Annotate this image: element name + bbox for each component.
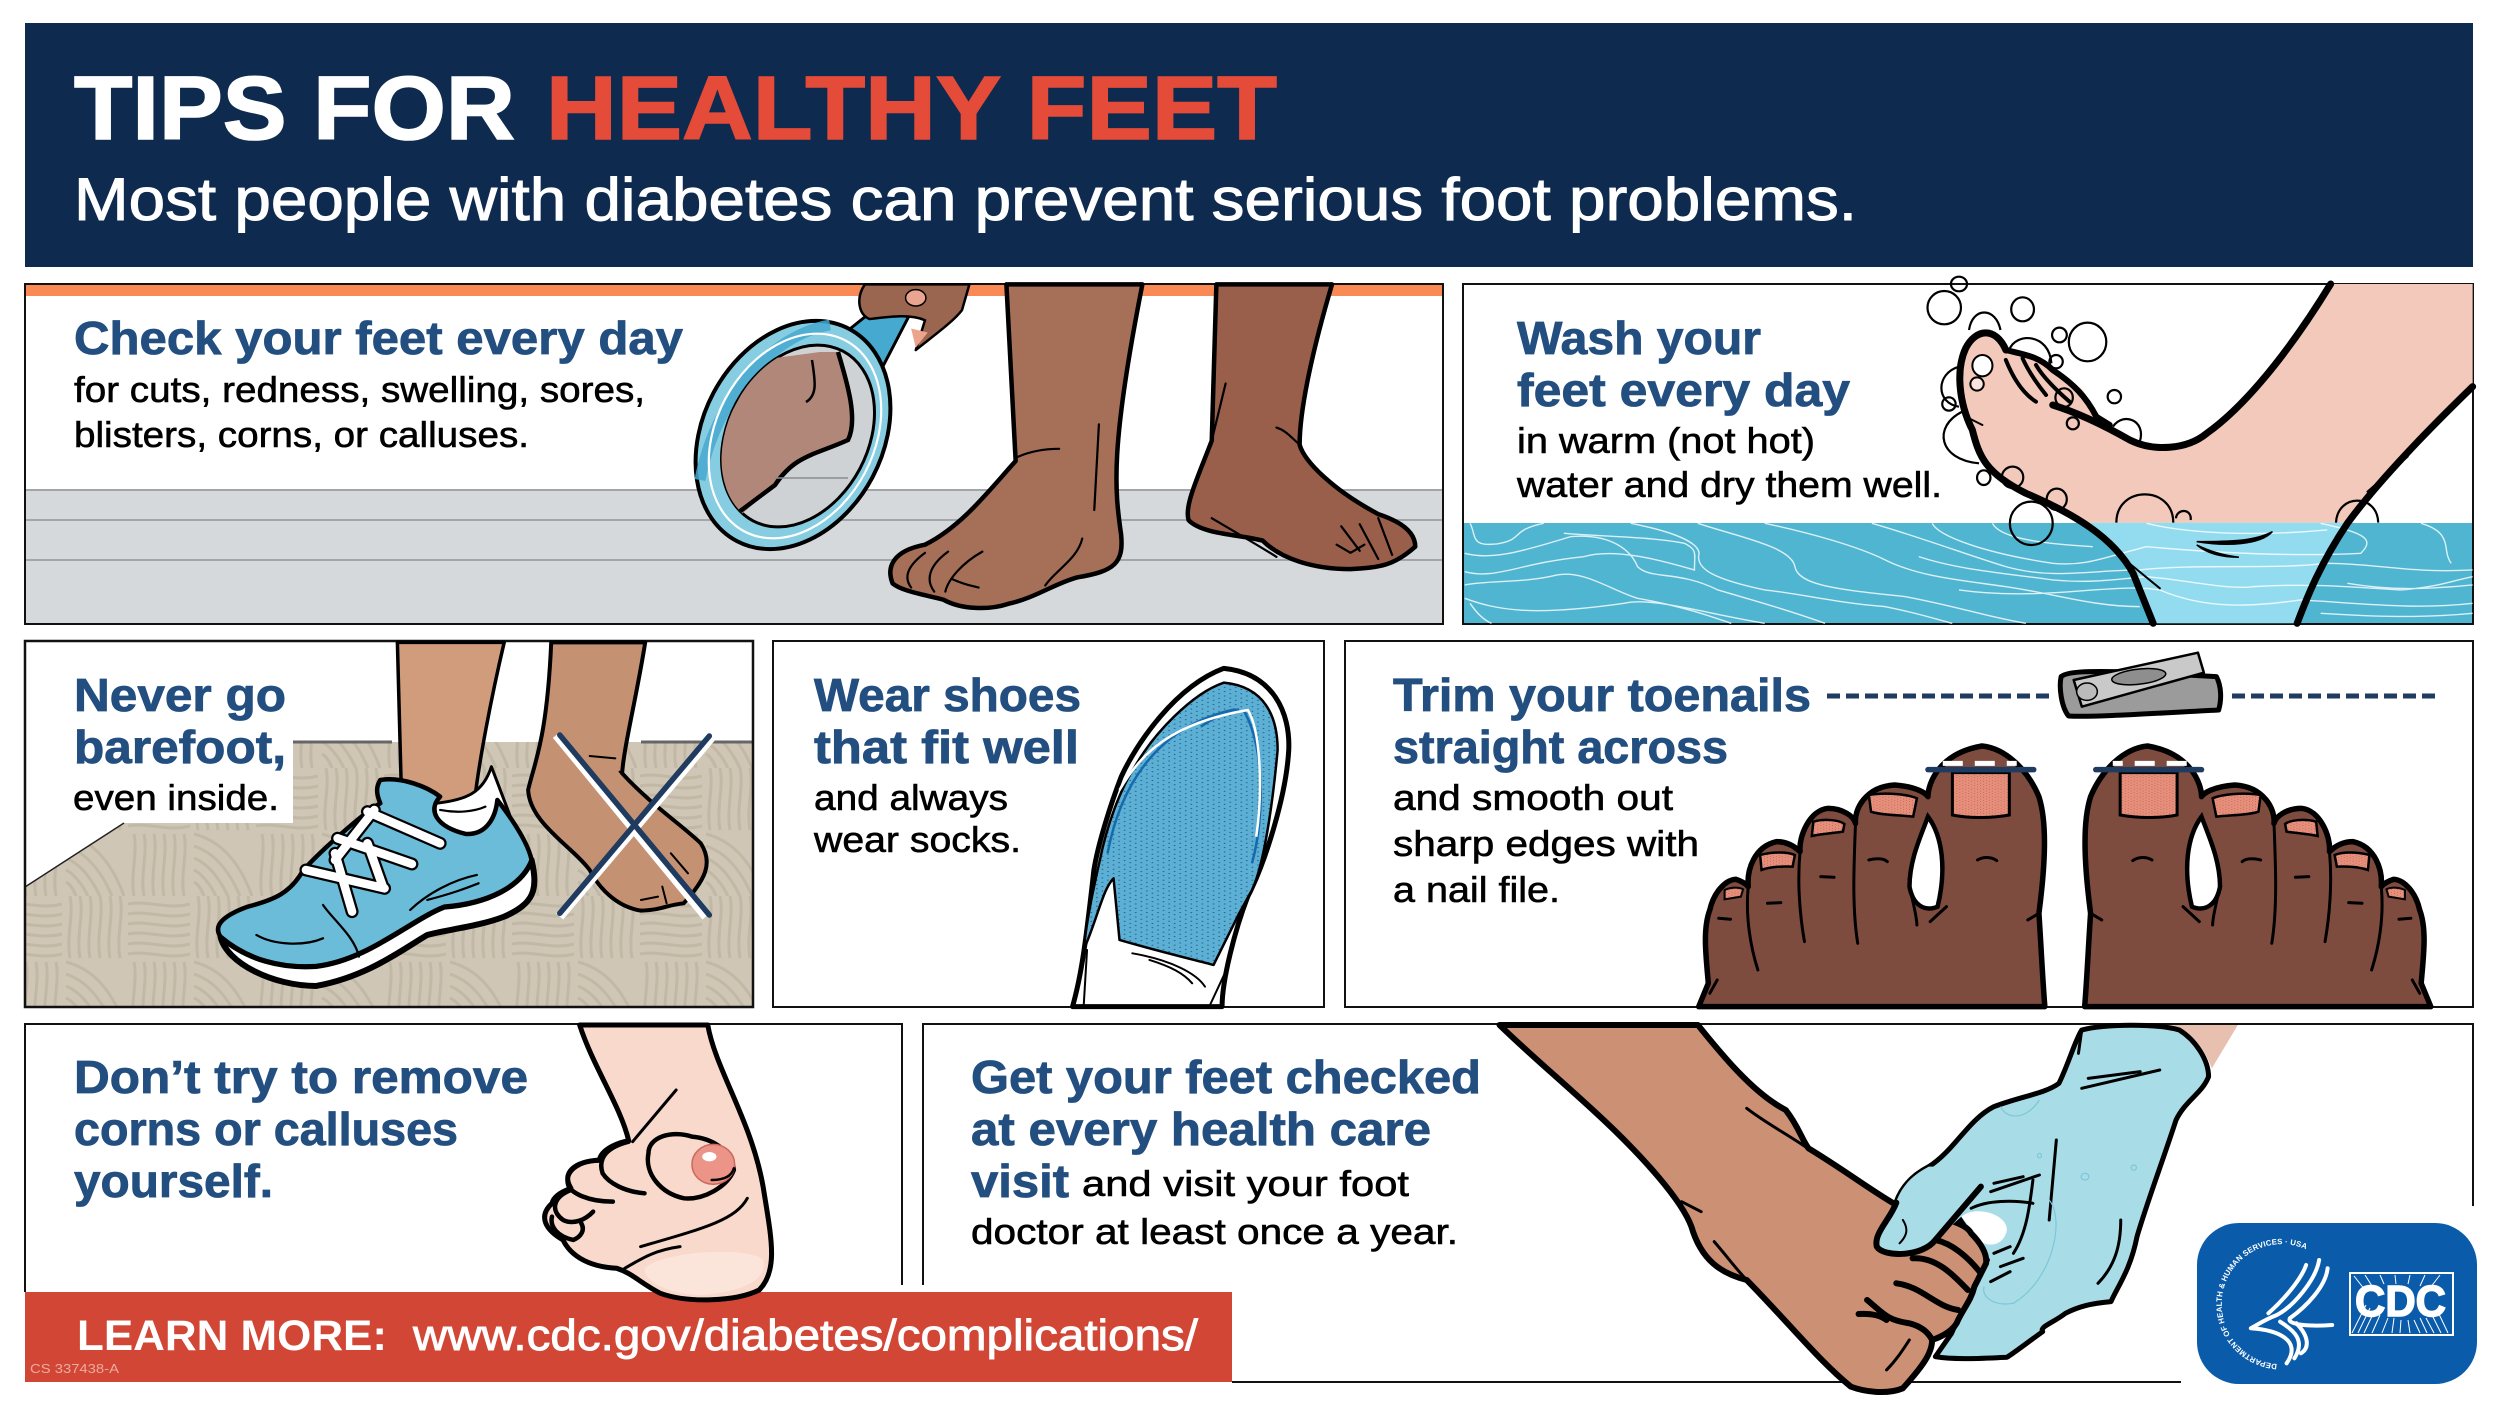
heading: at every health care [971, 1103, 1431, 1155]
heading [74, 669, 286, 773]
illustration: hand holding glass [859, 284, 969, 350]
carpet floor [25, 742, 753, 1007]
body text: a nail file. [1393, 869, 1560, 910]
heading: Never go [74, 669, 286, 721]
body text: doctor at least once a year. [971, 1211, 1458, 1252]
seal text: DEPARTMENT OF HEALTH & HUMAN SERVICES · USA [2216, 1238, 2306, 1370]
heading: that fit well [814, 721, 1079, 773]
heading: feet every day [1517, 364, 1850, 416]
body text [1393, 777, 1699, 910]
panel: wash your feet [1463, 277, 2473, 624]
CDC mark: CDC [2355, 1277, 2446, 1326]
body text: in warm (not hot) [1517, 420, 1815, 461]
panel: check your feet [25, 284, 1443, 624]
panel: never go barefoot [25, 641, 753, 1007]
heading: Don’t try to remove [74, 1051, 528, 1103]
body text: water and dry them well. [1516, 464, 1942, 505]
panel: get feet checked [923, 1024, 2473, 1392]
title: TIPS FOR [74, 59, 515, 159]
publication code: CS 337438-A [30, 1361, 119, 1376]
icon: nail clippers [2060, 653, 2221, 716]
body text: even inside. [73, 777, 279, 818]
heading: Trim your toenails [1393, 669, 1811, 721]
illustration: left foot toes [1699, 746, 2045, 1007]
body text: sharp edges with [1393, 823, 1699, 864]
heading [74, 1051, 528, 1207]
illustration: right foot toes [2085, 746, 2431, 1007]
body text: and visit your foot [1082, 1163, 1409, 1204]
panel: trim toenails [1345, 641, 2473, 1007]
illustration: gloved hand [1876, 1025, 2238, 1359]
body text [813, 777, 1021, 860]
panel: wear shoes that fit [773, 641, 1324, 1007]
heading: yourself. [74, 1155, 273, 1207]
icon: HHS eagle [2251, 1260, 2332, 1363]
heading [971, 1051, 1481, 1207]
illustration: shoe with insole [1073, 668, 1289, 1007]
illustration: foot with corn [545, 1025, 772, 1300]
heading: visit [971, 1155, 1069, 1207]
body text: and always [814, 777, 1008, 818]
learn more banner [25, 1292, 1232, 1382]
illustration: bare foot crossed out [528, 642, 714, 917]
heading [1517, 312, 1850, 416]
body text [74, 369, 645, 455]
panel: corns and calluses [25, 1024, 902, 1300]
heading [1393, 669, 1811, 773]
subtitle: Most people with diabetes can prevent serious foot problems. [74, 166, 1857, 233]
title highlight: HEALTHY FEET [546, 59, 1277, 159]
url: www.cdc.gov/diabetes/complications/ [412, 1311, 1199, 1360]
illustration: leg and sneaker [218, 642, 534, 986]
body text: and smooth out [1393, 777, 1673, 818]
heading: Check your feet every day [74, 312, 683, 364]
body text: wear socks. [813, 819, 1021, 860]
logo: HHS and CDC [2197, 1223, 2477, 1384]
dashed cutting guide [1827, 694, 2436, 698]
body text: for cuts, redness, swelling, sores, [74, 369, 645, 410]
learn more label: LEARN MORE: [77, 1312, 387, 1360]
illustration: foot in water with bubbles [1465, 277, 2473, 623]
heading: Get your feet checked [971, 1051, 1481, 1103]
body text: blisters, corns, or calluses. [74, 414, 529, 455]
heading [814, 669, 1081, 773]
body text [971, 1163, 1458, 1252]
header banner [25, 23, 2473, 267]
heading: barefoot, [74, 721, 286, 773]
illustration: magnifying glass [694, 316, 910, 552]
heading: straight across [1393, 721, 1728, 773]
heading: Wash your [1517, 312, 1761, 364]
illustration: right foot [1188, 284, 1415, 569]
illustration: foot being examined [1500, 1025, 1986, 1392]
body text [1516, 420, 1942, 505]
illustration: gloved thumb [1876, 1167, 1981, 1254]
illustration: left foot [890, 284, 1142, 608]
heading: Wear shoes [814, 669, 1081, 721]
heading: corns or calluses [74, 1103, 458, 1155]
